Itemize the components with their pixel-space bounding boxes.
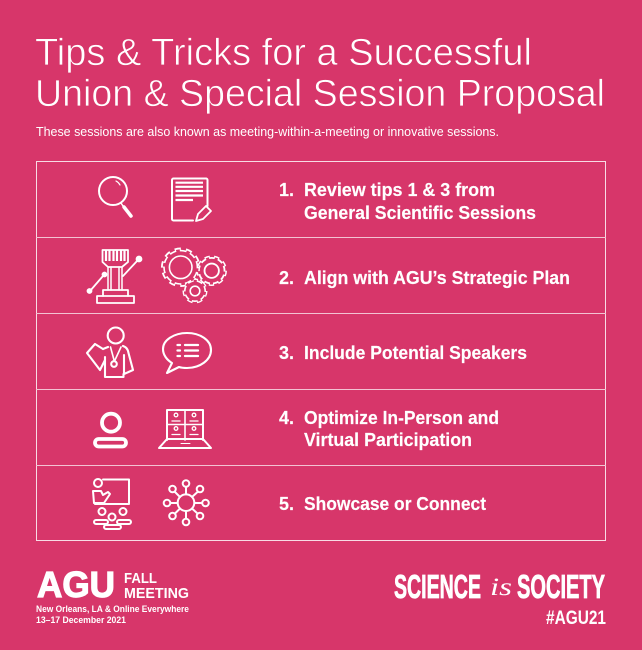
logo: AGU Fall Meeting: 13–17 December 2021 bbox=[36, 615, 126, 625]
title bbox=[35, 32, 605, 115]
logo: AGU Fall Meeting: AGU bbox=[37, 564, 115, 605]
row 4: text: Virtual Participation bbox=[304, 430, 472, 450]
slogan: Science is Society: SCIENCE bbox=[394, 568, 481, 605]
row 2: icon gears bbox=[164, 250, 225, 302]
slogan: Science is Society bbox=[394, 568, 605, 605]
row 3: icon speech bubble bbox=[163, 333, 211, 373]
row 3: text: Include Potential Speakers bbox=[304, 343, 527, 363]
slogan: Science is Society: is bbox=[490, 574, 512, 601]
row 1: icon document bbox=[172, 178, 211, 221]
row 4: icon laptop video grid bbox=[159, 410, 211, 448]
logo: AGU Fall Meeting: New Orleans, LA & Online Everywhere bbox=[36, 604, 189, 614]
row 4: text bbox=[279, 408, 499, 450]
row 5: icon network hub bbox=[164, 480, 209, 525]
row 1: text: Review tips 1 & 3 from bbox=[304, 180, 495, 200]
row 2: icon chess rook strategy bbox=[88, 250, 142, 303]
row 5: text: Showcase or Connect bbox=[304, 494, 486, 514]
row 2: text: 2. bbox=[279, 268, 294, 288]
table of tips bbox=[36, 162, 606, 540]
row 1: text: 1. bbox=[279, 180, 294, 200]
logo: AGU Fall Meeting: MEETING bbox=[124, 585, 189, 602]
title: Union & Special Session Proposal bbox=[35, 73, 605, 115]
row 5: text: 5. bbox=[279, 494, 294, 514]
row 4: text: 4. bbox=[279, 408, 294, 428]
row 4: icon person bbox=[95, 414, 126, 446]
row 1: icon magnifier bbox=[99, 177, 131, 216]
row 2: text: Align with AGU’s Strategic Plan bbox=[304, 268, 570, 288]
row 5: icon presenter and audience bbox=[93, 479, 131, 529]
title: Tips & Tricks for a Successful bbox=[35, 32, 532, 74]
hashtag: #AGU21 bbox=[546, 608, 606, 629]
logo: AGU Fall Meeting: FALL bbox=[124, 570, 157, 587]
row 4: text: Optimize In-Person and bbox=[304, 408, 499, 428]
logo: AGU Fall Meeting bbox=[36, 564, 189, 625]
row 1: text: General Scientific Sessions bbox=[304, 203, 536, 223]
subtitle: These sessions are also known as meeting-within-a-meeting or innovative sessions. bbox=[36, 125, 499, 139]
row 1: text bbox=[279, 180, 536, 223]
row 3: icon speaker with badge bbox=[87, 328, 133, 377]
row 3: text: 3. bbox=[279, 343, 294, 363]
